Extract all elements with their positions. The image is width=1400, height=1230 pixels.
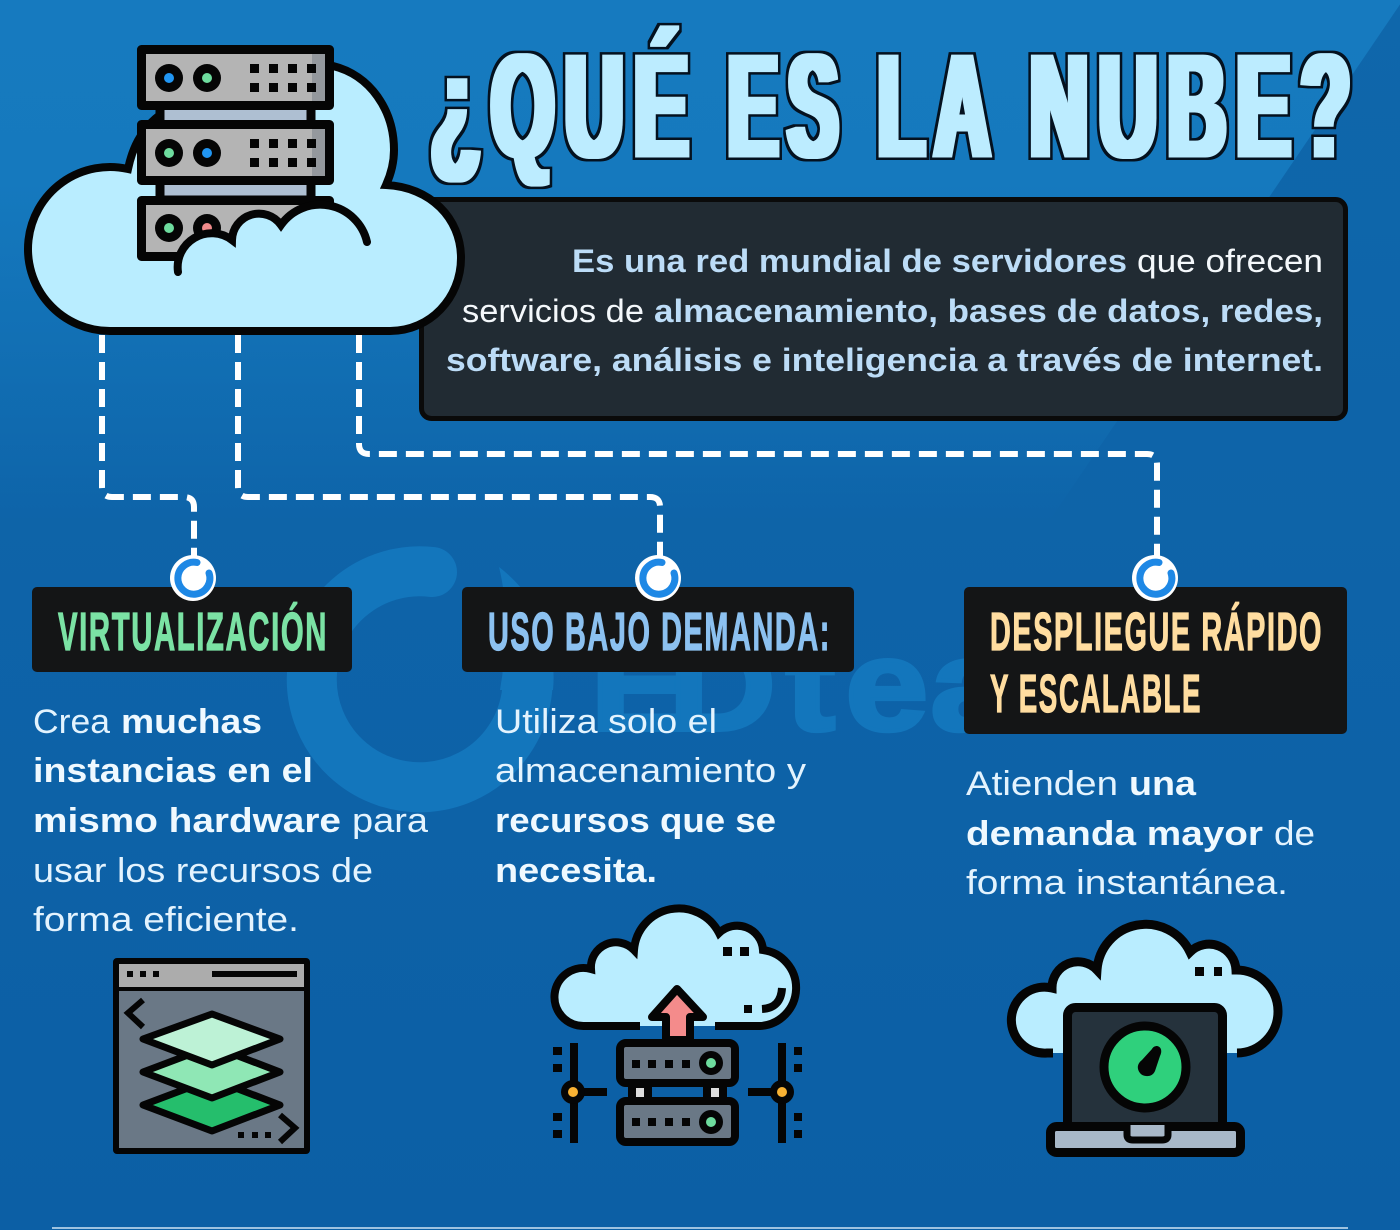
icon: cloud with servers bbox=[28, 50, 461, 331]
title bbox=[431, 24, 1361, 189]
description: muchas bbox=[121, 703, 262, 741]
connector dot bbox=[1132, 555, 1178, 601]
definition text: almacenamiento, bases de datos, redes, bbox=[654, 293, 1323, 329]
heading bbox=[32, 587, 352, 672]
panel: definition bbox=[422, 200, 1346, 418]
footer rule bbox=[52, 1227, 1348, 1229]
heading bbox=[462, 587, 854, 672]
definition text: Es una red mundial de servidores bbox=[572, 243, 1127, 279]
title: LA bbox=[878, 24, 1000, 189]
description: forma instantánea. bbox=[966, 864, 1288, 902]
panel: despliegue rápido bbox=[964, 555, 1347, 1152]
description: recursos que se bbox=[495, 802, 776, 840]
heading: VIRTUALIZACIÓN bbox=[58, 602, 328, 662]
definition text: software, análisis e inteligencia a través de internet. bbox=[446, 342, 1323, 378]
heading bbox=[964, 587, 1347, 734]
description: mismo hardware bbox=[33, 802, 341, 840]
icon: layered window bbox=[116, 961, 307, 1151]
heading: USO BAJO DEMANDA: bbox=[488, 602, 831, 662]
description: forma eficiente. bbox=[33, 901, 299, 939]
icon: laptop speed with cloud bbox=[1011, 924, 1278, 1152]
description: almacenamiento y bbox=[495, 752, 806, 790]
dashed connectors bbox=[102, 335, 1157, 556]
heading: Y ESCALABLE bbox=[990, 664, 1202, 724]
description bbox=[495, 703, 806, 890]
watermark logo: EDteam bbox=[590, 612, 1143, 758]
description: una bbox=[1129, 765, 1197, 803]
title: ES bbox=[728, 24, 848, 189]
description: necesita. bbox=[495, 852, 657, 890]
definition text: que ofrecen bbox=[1137, 243, 1323, 279]
definition text: servicios de bbox=[462, 293, 644, 329]
description: de bbox=[1274, 815, 1315, 853]
description bbox=[33, 703, 428, 939]
connector dot bbox=[635, 555, 681, 601]
watermark logo bbox=[312, 567, 1143, 787]
description: para bbox=[352, 802, 428, 840]
definition text bbox=[446, 243, 1323, 378]
panel: uso bajo demanda bbox=[462, 555, 854, 1143]
description: Atienden bbox=[966, 765, 1118, 803]
connector dot bbox=[170, 555, 216, 601]
description: usar los recursos de bbox=[33, 852, 373, 890]
icon: upload to cloud bbox=[553, 908, 802, 1143]
panel: virtualización bbox=[32, 555, 428, 1151]
description: Utiliza solo el bbox=[495, 703, 717, 741]
description: Crea bbox=[33, 703, 110, 741]
title: ¿QUÉ bbox=[431, 24, 699, 189]
description bbox=[966, 765, 1315, 902]
description: instancias en el bbox=[33, 752, 313, 790]
description: demanda mayor bbox=[966, 815, 1263, 853]
